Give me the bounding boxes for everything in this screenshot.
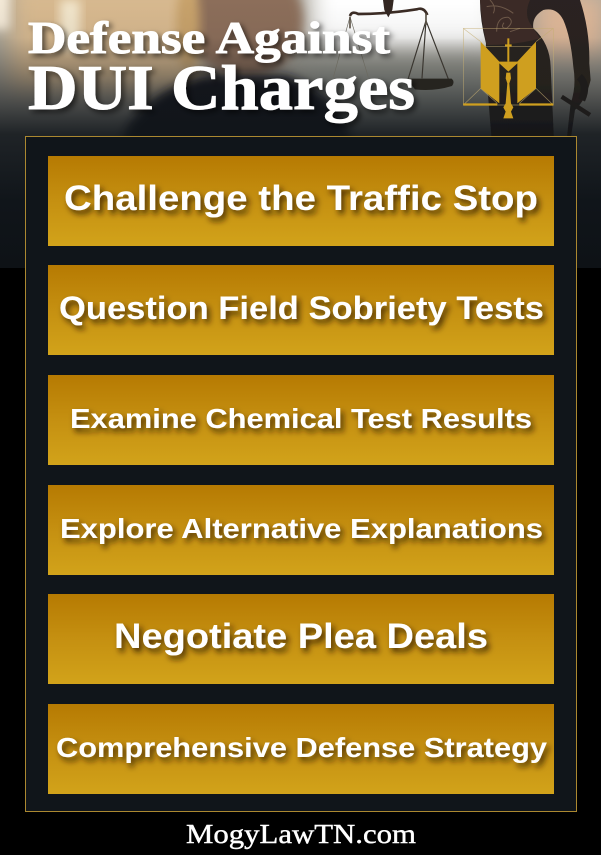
item: Comprehensive Defense Strategy [48, 704, 554, 794]
logo: gold M monogram [463, 28, 553, 118]
item: Examine Chemical Test Results [48, 375, 554, 465]
item: Challenge the Traffic Stop [48, 156, 554, 246]
panel: defense list [26, 136, 576, 812]
item: Negotiate Plea Deals: Negotiate Plea Deals [114, 617, 488, 656]
title line: DUI Charges: DUI Charges [28, 52, 415, 123]
item: Comprehensive Defense Strategy: Comprehensive Defense Strategy [56, 732, 547, 763]
title line: Defense Against: Defense Against [28, 12, 391, 63]
statue of justice [480, 0, 591, 140]
item: Explore Alternative Explanations [48, 485, 554, 575]
footer website: MogyLawTN.com [186, 819, 416, 849]
background photo: lawyer and statue of justice [0, 0, 601, 268]
item: Negotiate Plea Deals [48, 594, 554, 684]
item: Challenge the Traffic Stop: Challenge the Traffic Stop [64, 179, 538, 218]
item: Question Field Sobriety Tests: Question Field Sobriety Tests [59, 290, 544, 326]
item: Explore Alternative Explanations: Explore Alternative Explanations [60, 513, 543, 544]
item: Examine Chemical Test Results: Examine Chemical Test Results [70, 403, 532, 434]
scales of justice [333, 0, 454, 90]
title [28, 12, 415, 123]
item: Question Field Sobriety Tests [48, 265, 554, 355]
